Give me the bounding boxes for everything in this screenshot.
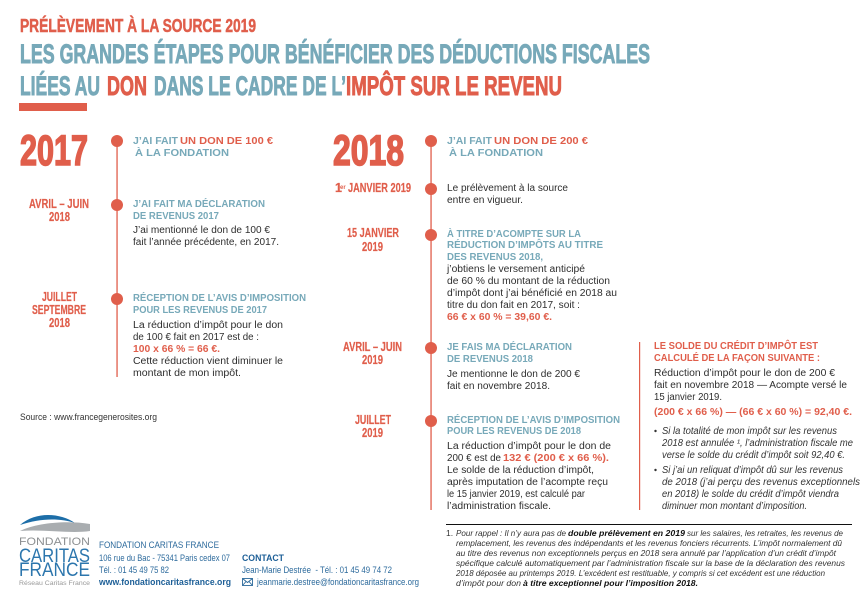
date: avril juin 2018: AVRIL – JUIN	[29, 197, 89, 211]
footnote	[446, 524, 852, 588]
step: don de 100 euros	[133, 135, 273, 159]
step: avis d'imposition 2018	[447, 413, 620, 512]
step: déclaration 2018: fait en novembre 2018.	[447, 381, 550, 392]
step: acompte: RÉDUCTION D’IMPÔTS AU TITRE	[447, 238, 603, 251]
subtitle: PRÉLÈVEMENT À LA SOURCE 2019	[20, 15, 256, 36]
step: avis d'imposition 2017: montant de mon impôt.	[133, 368, 241, 379]
step: déclaration 2018: DE REVENUS 2018	[447, 353, 533, 365]
bullet: reliquat d'impôt	[654, 465, 860, 512]
title: IMPÔT SUR LE REVENU	[346, 70, 562, 101]
step: déclaration 2018: JE FAIS MA DÉCLARATION	[447, 340, 572, 353]
panel: 2017 timeline	[20, 127, 306, 379]
step: acompte: j’obtiens le versement anticipé	[446, 264, 585, 275]
step: acompte: titre du don fait en 2017, soit :	[447, 300, 580, 311]
date: 1er janvier 2019: 1	[335, 181, 342, 195]
step: don de 100 euros: J’AI FAIT	[133, 135, 179, 147]
title accent bar	[19, 103, 87, 111]
address block	[98, 540, 231, 588]
date: 1er janvier 2019: er	[340, 185, 346, 191]
contact block	[242, 553, 419, 588]
bullet: reliquat d'impôt: Si j’ai un reliquat d’impôt dû sur les revenus	[662, 465, 843, 476]
title: DON	[107, 71, 147, 101]
step: acompte: de 60 % du montant de la réduction	[447, 276, 610, 287]
step: avis d'imposition 2018: le 15 janvier 2019, est calculé par	[447, 489, 586, 500]
footnote: d’impôt pour don	[456, 578, 521, 588]
date: juillet septembre 2018: JUILLET	[42, 290, 77, 304]
step: don de 100 euros: UN DON DE 100 €	[180, 135, 273, 147]
step: avis d'imposition 2017: La réduction d’impôt pour le don	[133, 320, 283, 331]
date: avril juin 2019	[343, 340, 402, 367]
step: acompte: À TITRE D’ACOMPTE SUR LA	[447, 227, 581, 240]
footnote: remplacement, les revenus des indépendants et les revenus fonciers récurrents. L’impôt normalement dû	[456, 538, 842, 548]
date: juillet 2019	[355, 413, 391, 440]
date: avril juin 2018: 2018	[49, 210, 70, 224]
icon: envelope	[242, 578, 252, 586]
heading: solde du crédit d'impôt: CALCULÉ DE LA FAÇON SUIVANTE :	[654, 351, 820, 364]
logo: Fondation Caritas France: Réseau Caritas France	[19, 581, 91, 587]
year 2018: 2018	[333, 127, 404, 175]
footnote: sur les salaires, les retraites, les revenus de	[687, 528, 843, 538]
footnote: 1.	[446, 528, 453, 538]
footnote: au titre des revenus non exceptionnels perçus en 2018 sera annulé par l’application d’un crédit d’impôt	[456, 548, 837, 558]
date: juillet 2019: 2019	[362, 426, 383, 440]
date: juillet septembre 2018	[32, 290, 86, 330]
address block: www.fondationcaritasfrance.org	[98, 577, 231, 588]
footnote: double prélèvement en 2019	[568, 528, 685, 538]
panel: calcul du solde	[639, 339, 860, 512]
logo: Fondation Caritas France: FRANCE	[19, 560, 90, 581]
step: avis d'imposition 2018: La réduction d’impôt pour le don de	[447, 441, 611, 452]
date: avril juin 2018	[29, 197, 89, 224]
calculation text	[654, 368, 852, 418]
logo swoosh	[20, 515, 90, 532]
date: juillet 2019: JUILLET	[355, 413, 391, 427]
calculation text: Réduction d’impôt pour le don de 200 €	[654, 368, 835, 379]
year 2017: 2017	[20, 127, 88, 175]
bullet: impôt annulé: Si la totalité de mon impôt sur les revenus	[662, 426, 837, 437]
source: Source : www.francegenerosites.org	[20, 412, 157, 422]
step: avis d'imposition 2017: POUR LES REVENUS DE 2017	[133, 304, 267, 316]
date: 15 janvier 2019	[347, 226, 399, 254]
step: don de 100 euros: À LA FONDATION	[135, 146, 229, 159]
date: avril juin 2019: 2019	[362, 353, 383, 367]
step: avis d'imposition 2018: RÉCEPTION DE L’AVIS D’IMPOSITION	[447, 413, 620, 426]
heading: solde du crédit d'impôt	[654, 339, 820, 364]
calculation text: 15 janvier 2019.	[654, 392, 722, 403]
step: déclaration 2017: DE REVENUS 2017	[133, 210, 219, 222]
footnote: spécifique calculé automatiquement par l’administration fiscale sur la base de la déclaration des revenus	[456, 558, 846, 568]
bullet: reliquat d'impôt: diminuer mon montant d’imposition.	[662, 501, 807, 512]
date: 1er janvier 2019: JANVIER 2019	[348, 181, 411, 195]
step: acompte: 66 € x 60 % = 39,60 €.	[447, 312, 552, 323]
step: déclaration 2017: fait l’année précédente, en 2017.	[133, 237, 279, 248]
title	[20, 38, 650, 101]
contact block: Jean-Marie Destrée - Tél. : 01 45 49 74 72	[242, 565, 392, 576]
calculation text: fait en novembre 2018 — Acompte versé le	[654, 380, 847, 391]
step: avis d'imposition 2018: POUR LES REVENUS DE 2018	[447, 425, 581, 437]
timeline axis 2017	[111, 135, 123, 377]
panel: 2018 timeline	[333, 127, 620, 512]
footnote: à titre exceptionnel pour l’imposition 2018.	[523, 578, 698, 588]
step: avis d'imposition 2018: Le solde de la réduction d’impôt,	[447, 465, 594, 476]
address block: Tél. : 01 45 49 75 82	[99, 565, 169, 576]
step: avis d'imposition 2018: après imputation de l’acompte reçu	[447, 477, 608, 488]
footnote: Pour rappel : Il n’y aura pas de	[456, 528, 566, 538]
title: DANS LE CADRE DE L’	[154, 71, 346, 101]
timeline axis 2018	[425, 135, 437, 510]
bullet: impôt annulé: 2018 est annulée ¹, l’administration fiscale me	[661, 438, 853, 449]
step: prélèvement à la source: Le prélèvement à la source	[447, 183, 568, 194]
step: don de 200 euros: J’AI FAIT	[447, 135, 493, 147]
step: prélèvement à la source: entre en vigueur.	[447, 195, 523, 206]
date: 15 janvier 2019: 2019	[362, 240, 383, 254]
title: LIÉES AU	[20, 70, 100, 101]
date: juillet septembre 2018: 2018	[49, 316, 70, 330]
date: 1er janvier 2019	[335, 181, 411, 195]
step: don de 200 euros: UN DON DE 200 €	[494, 135, 588, 147]
step: avis d'imposition 2017	[133, 291, 306, 379]
address block: 106 rue du Bac - 75341 Paris cedex 07	[99, 553, 230, 564]
step: avis d'imposition 2017: 100 x 66 % = 66 €.	[133, 344, 220, 355]
step: déclaration 2018: Je mentionne le don de 200 €	[447, 369, 580, 380]
step: acompte: DES REVENUS 2018,	[447, 251, 543, 263]
step: avis d'imposition 2018: 200 € est de	[447, 453, 501, 464]
bullet: reliquat d'impôt: de 2018 (j’ai perçu des revenus exceptionnels	[662, 477, 860, 488]
heading: solde du crédit d'impôt: LE SOLDE DU CRÉDIT D’IMPÔT EST	[654, 339, 819, 352]
contact block: jeanmarie.destree@fondationcaritasfrance.org	[256, 577, 419, 588]
step: acompte: d’impôt dont j’ai bénéficié en 2018 au	[447, 288, 617, 299]
contact block: CONTACT	[242, 553, 284, 564]
logo: Fondation Caritas France	[19, 515, 91, 587]
step: déclaration 2017: J’ai mentionné le don de 100 €	[133, 225, 270, 236]
step: don de 200 euros: À LA FONDATION	[449, 146, 543, 159]
step: déclaration 2017: J’AI FAIT MA DÉCLARATION	[133, 197, 265, 210]
step: déclaration 2018	[447, 340, 580, 392]
step: avis d'imposition 2018: l’administration fiscale.	[447, 501, 551, 512]
bullet: reliquat d'impôt: en 2018) le solde du crédit d’impôt viendra	[662, 489, 839, 500]
date: juillet septembre 2018: SEPTEMBRE	[32, 303, 86, 317]
address block: FONDATION CARITAS FRANCE	[99, 540, 219, 551]
step: déclaration 2017	[133, 197, 279, 248]
logo: Fondation Caritas France: CARITAS	[19, 546, 90, 567]
date: avril juin 2019: AVRIL – JUIN	[343, 340, 402, 354]
step: avis d'imposition 2017: RÉCEPTION DE L’AVIS D’IMPOSITION	[133, 291, 306, 304]
step: avis d'imposition 2017: Cette réduction vient diminuer le	[133, 356, 283, 367]
step: avis d'imposition 2017: de 100 € fait en 2017 est de :	[133, 332, 259, 343]
footnote: 2018 déposée au printemps 2019. L’excédent est restituable, y compris si cet excédent est une réduction	[455, 568, 825, 578]
bullet: impôt annulé: verse le solde du crédit d’impôt soit 92,40 €.	[662, 450, 845, 461]
step: prélèvement à la source	[447, 183, 568, 206]
logo: Fondation Caritas France: FONDATION	[19, 536, 90, 548]
step: avis d'imposition 2018: 132 € (200 € x 66 %).	[503, 453, 609, 464]
step: acompte	[446, 227, 617, 323]
calculation text: (200 € x 66 %) — (66 € x 60 %) = 92,40 €.	[654, 407, 852, 418]
step: don de 200 euros	[447, 135, 588, 159]
bullet: impôt annulé	[654, 426, 853, 461]
date: 15 janvier 2019: 15 JANVIER	[347, 226, 399, 240]
header	[19, 15, 650, 111]
